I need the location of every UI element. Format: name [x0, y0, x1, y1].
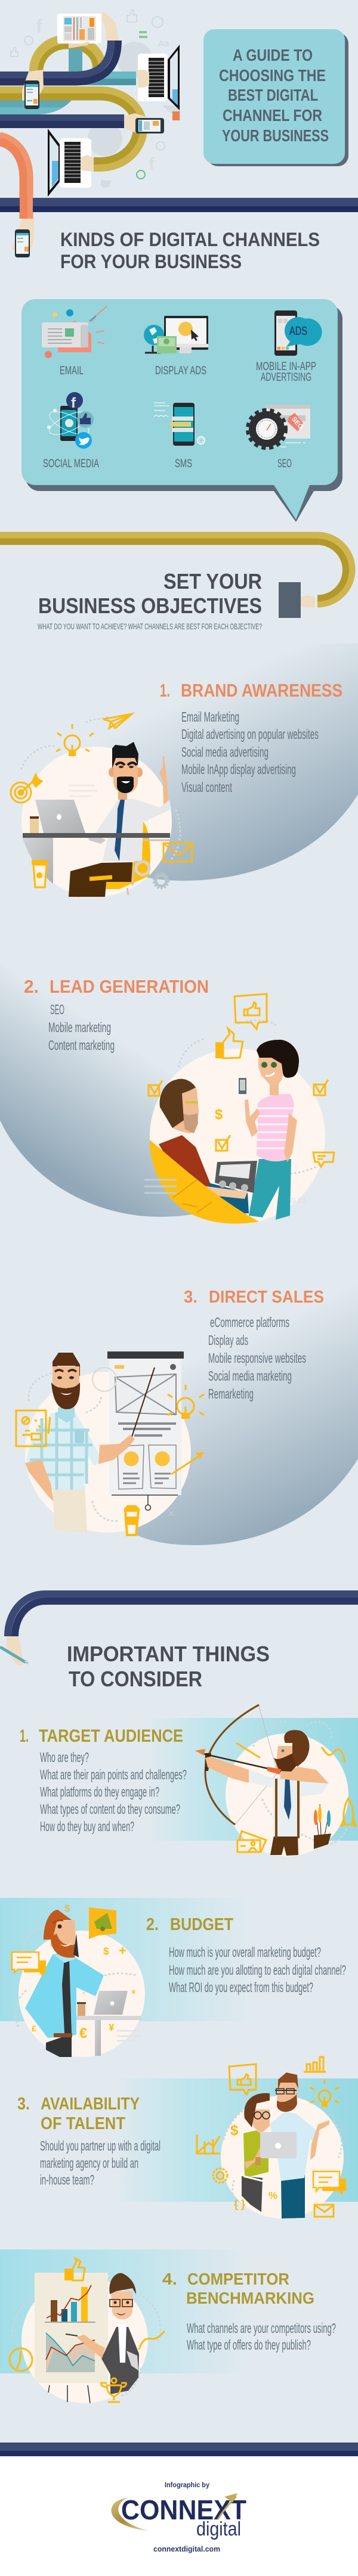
website: connextdigital.com: [153, 2544, 220, 2553]
woman: [242, 2093, 270, 2212]
consideration 2: budget: 2.: [146, 1915, 159, 1934]
logo: connext digital: digital: [196, 2518, 241, 2540]
laptop right: [138, 45, 180, 120]
icon: coffee cup: [32, 860, 48, 887]
faint decorations: [144, 1180, 177, 1193]
chair: [81, 818, 150, 889]
man seated: [159, 1079, 257, 1214]
objective 3: direct sales: 3.: [184, 1288, 197, 1307]
arrow: [203, 1754, 281, 1772]
symbols: { }: [234, 2198, 245, 2210]
consideration 1: target audience: What platforms do they engage in?: [40, 1784, 159, 1800]
icon: mobile in-app ads: ADS: [289, 325, 307, 338]
icon: light bulb: [56, 724, 94, 756]
man on phone: [25, 1910, 104, 2057]
channel labels: MOBILE IN-APP: [256, 361, 316, 373]
heading: set your business objectives: [38, 569, 262, 631]
navy lower arm: [0, 114, 124, 121]
currency symbols: $: [103, 1946, 109, 1957]
channel labels: DISPLAY ADS: [155, 365, 206, 377]
consideration 4: competitor benchmarking: [162, 2270, 336, 2353]
consideration 1: target audience: TARGET AUDIENCE: [39, 1726, 183, 1746]
icon: bulb: [168, 1385, 204, 1419]
consideration 1: target audience: How do they buy and when?: [40, 1819, 134, 1834]
icon: paper plane: [103, 714, 132, 728]
pale lines: [117, 2031, 142, 2041]
currency symbols: [32, 1903, 136, 2041]
icon: id card: [237, 1831, 266, 1852]
icon: target: [11, 775, 42, 803]
icon: large thumbs up: [215, 1028, 243, 1058]
icon: growth chart: [197, 2134, 220, 2154]
credit line: Infographic by: [165, 2481, 209, 2489]
consideration 2: budget: [146, 1915, 346, 1995]
channel labels: SMS: [175, 458, 192, 470]
icon: thumbs up bubble: [229, 2064, 256, 2095]
icon: strategy board: [16, 1410, 50, 1446]
swoosh background 2: [0, 941, 251, 1217]
man with laptop: [270, 2072, 329, 2218]
icon: email: [42, 306, 107, 358]
icon: seo: [248, 405, 310, 448]
orange arm overlapping band: [12, 194, 35, 257]
objective 1: brand awareness: Visual content: [181, 779, 232, 795]
illustration: availability of talent: [197, 2057, 346, 2218]
hero illustration: arms with devices: $: [87, 136, 91, 145]
consideration 4: competitor benchmarking: COMPETITOR: [187, 2270, 289, 2288]
currency symbols: ¥: [109, 2022, 115, 2033]
objective 1: brand awareness: Email Marketing: [181, 709, 239, 725]
consideration 3: availability of talent: in-house team?: [40, 2172, 94, 2187]
objective 2: lead generation: SEO: [50, 1002, 64, 1017]
symbols: [234, 2190, 277, 2210]
logo: connext digital: CONNEXT: [121, 2494, 246, 2525]
consideration 4: competitor benchmarking: 4.: [162, 2270, 177, 2288]
olive S arm: [0, 90, 144, 168]
channel labels: EMAIL: [60, 365, 84, 377]
icon: chat bubbles: [313, 2171, 346, 2195]
flip chart: [35, 2273, 108, 2403]
consideration 3: availability of talent: marketing agency or build an: [40, 2155, 138, 2171]
man with glasses: [66, 2273, 139, 2394]
objective 2: lead generation: [24, 976, 209, 1053]
title card: [203, 29, 348, 166]
consideration 3: availability of talent: [17, 2095, 161, 2187]
heading: set your business objectives: SET YOUR: [163, 569, 262, 593]
faint marks: [169, 1511, 174, 1516]
illustration: lead generation: [144, 994, 334, 1224]
pale background icons: f: [149, 154, 155, 174]
symbols: %: [268, 2190, 277, 2201]
icon: bulb: [310, 2080, 339, 2107]
man with pointer: [25, 1353, 135, 1533]
teal arm to tablet: [69, 49, 82, 73]
title card: YOUR BUSINESS: [222, 126, 329, 145]
icon: social media: [47, 392, 94, 449]
icon: rocket: [341, 1798, 356, 1826]
objective 3: direct sales: Remarketing: [208, 1386, 254, 1402]
objective 2: lead generation: Content marketing: [48, 1037, 115, 1053]
heading: kinds of digital channels: [60, 229, 320, 272]
table, laptop, cup: [95, 2020, 101, 2056]
consideration 3: availability of talent: 3.: [17, 2095, 30, 2114]
orange arm: [0, 139, 26, 219]
consideration 1: target audience: Who are they?: [40, 1750, 89, 1765]
objective 2: lead generation: LEAD GENERATION: [50, 976, 209, 997]
illustration: competitor benchmarking: [10, 2258, 165, 2403]
heading: kinds of digital channels: FOR YOUR BUSINESS: [60, 251, 242, 272]
consideration 1: target audience: 1.: [20, 1726, 29, 1746]
icon: yellow arrow: [236, 1743, 260, 1758]
consideration 3: availability of talent: OF TALENT: [41, 2114, 125, 2133]
objective 3: direct sales: eCommerce platforms: [210, 1315, 289, 1330]
olive ring arm: [36, 42, 99, 74]
consideration 1: target audience: What types of content do they consume?: [40, 1801, 180, 1817]
swoosh background 1: [60, 644, 358, 881]
objective 3: direct sales: Display ads: [208, 1332, 248, 1348]
navy divider band: [0, 198, 358, 212]
objective 3: direct sales: DIRECT SALES: [209, 1288, 324, 1307]
dotted arcs: [29, 1374, 119, 1521]
currency symbols: ×: [131, 1988, 135, 1996]
panel: digital channels speech bubble: [21, 299, 342, 522]
icon: envelope: [163, 843, 192, 862]
band 4 background: [0, 2249, 251, 2373]
icon: trophy: [101, 2378, 126, 2402]
icon: chat bubble: [313, 1152, 334, 1167]
hand and phone on upper navy arm: [22, 70, 44, 101]
channel labels: ADVERTISING: [261, 371, 311, 384]
icon: thumbs up: [64, 2258, 85, 2280]
icons: check boxes: [149, 1080, 328, 1151]
laptop: [260, 2132, 297, 2158]
phone horizontal: [135, 118, 164, 133]
icon: dollar: $: [230, 2123, 239, 2139]
objective 3: direct sales: [184, 1288, 324, 1402]
pale background icons: Aa: [158, 39, 169, 49]
gears: [156, 875, 166, 886]
desk top: [23, 833, 170, 838]
illustration: brand awareness: [11, 714, 192, 897]
desk legs and grey panel: [23, 838, 53, 884]
consideration 2: budget: BUDGET: [170, 1915, 233, 1934]
icon: dollar sign: $: [215, 1107, 223, 1123]
illustration: direct sales: [16, 1351, 204, 1535]
objective 2: lead generation: Mobile marketing: [48, 1020, 111, 1035]
wireframe presentation board: [107, 1351, 184, 1510]
quiver: [314, 1834, 331, 1849]
heading: set your business objectives: BUSINESS OBJECTIVES: [38, 593, 262, 618]
icon: gear: [213, 2168, 227, 2183]
footer navy band: [0, 2443, 358, 2456]
objective 1: brand awareness: 1.: [160, 680, 170, 701]
title card: CHANNEL FOR: [223, 106, 322, 125]
pale decorative lines: [69, 785, 98, 796]
woman: [239, 1040, 299, 1220]
heading: important things to consider: TO CONSIDER: [69, 1667, 202, 1691]
icon: seo: SEO: [290, 415, 304, 431]
consideration 3: availability of talent: Should you partner up with a digital: [40, 2138, 161, 2154]
icon: sms: [154, 403, 205, 446]
icon: wave line: [139, 2331, 165, 2350]
objective 2: lead generation: 2.: [24, 976, 39, 997]
hero illustration: arms with devices: [0, 10, 180, 219]
navy arm curved: [0, 41, 111, 75]
band 3 background: [113, 2078, 358, 2202]
icon: envelope: [314, 2205, 334, 2217]
torso and pants: [270, 1835, 298, 1856]
icon: bar chart: [304, 2057, 326, 2072]
channel labels: [43, 361, 316, 470]
icon: money bubble: [89, 1907, 116, 1939]
logo: connext digital: [111, 2493, 246, 2540]
currency symbols: €: [79, 2025, 87, 2041]
icon: wave line: [322, 1747, 345, 1763]
icon: display ads: [144, 316, 208, 353]
objective 3: direct sales: Social media marketing: [208, 1368, 292, 1384]
olive arm with briefcase: [0, 535, 352, 618]
navy arm with hand and pen: [1, 1594, 358, 1665]
laptop lower: [48, 129, 94, 197]
icon: mobile in-app ads: [274, 310, 322, 356]
title card: CHOOSING THE: [219, 66, 326, 85]
icon: social media: f: [71, 395, 76, 411]
pale background icons: [11, 10, 180, 188]
heading: important things to consider: [67, 1642, 270, 1691]
heading: kinds of digital channels: KINDS OF DIGITAL CHANNELS: [60, 229, 320, 250]
currency symbols: $: [64, 1903, 70, 1914]
icon: clock: [10, 2348, 32, 2371]
channel labels: SEO: [277, 458, 292, 470]
illustration: budget: [12, 1903, 145, 2057]
bow and string: [235, 1704, 277, 1825]
band 1 background: [146, 1718, 358, 1841]
illustration: target audience archer: [195, 1704, 356, 1856]
head: [276, 1746, 295, 1773]
footer white area with logo: [0, 2456, 358, 2576]
man: [69, 742, 171, 897]
channel labels: SOCIAL MEDIA: [43, 458, 99, 470]
consideration 1: target audience: What are their pain points and challenges?: [40, 1767, 187, 1782]
currency symbols: +: [119, 1943, 126, 1958]
laptop: [35, 800, 85, 833]
bean bag: [150, 1140, 259, 1224]
currency symbols: ○: [132, 1988, 136, 1995]
consideration 4: competitor benchmarking: BENCHMARKING: [186, 2289, 314, 2307]
swoosh background 3: [60, 1260, 358, 1545]
objective 1: brand awareness: [160, 680, 342, 795]
currency symbols: £: [32, 2024, 36, 2033]
hand raised: [101, 12, 119, 41]
icon: chat bubbles: [12, 1952, 46, 1977]
title card: BEST DIGITAL: [228, 86, 318, 104]
icon: growth arrow: [171, 1452, 204, 1474]
band 2 background: [0, 1898, 254, 2021]
heading: important things to consider: IMPORTANT THINGS: [67, 1642, 270, 1666]
objective 1: brand awareness: Social media advertising: [181, 744, 268, 760]
pointer: [132, 1368, 155, 1437]
consideration 1: target audience: [20, 1726, 187, 1834]
icon: coffee cup: [124, 1505, 140, 1535]
icon: clock faint: [92, 1368, 116, 1391]
consideration 3: availability of talent: AVAILABILITY: [41, 2095, 140, 2114]
title card: A GUIDE TO: [233, 46, 313, 64]
pale background icons: f: [36, 15, 42, 37]
dotted arcs: [21, 717, 180, 861]
illustration: lead generation: 0 01: [291, 1196, 306, 1205]
arms: [205, 1757, 249, 1783]
tablet: [57, 14, 101, 43]
icon: speech thumbs up: [234, 994, 267, 1029]
